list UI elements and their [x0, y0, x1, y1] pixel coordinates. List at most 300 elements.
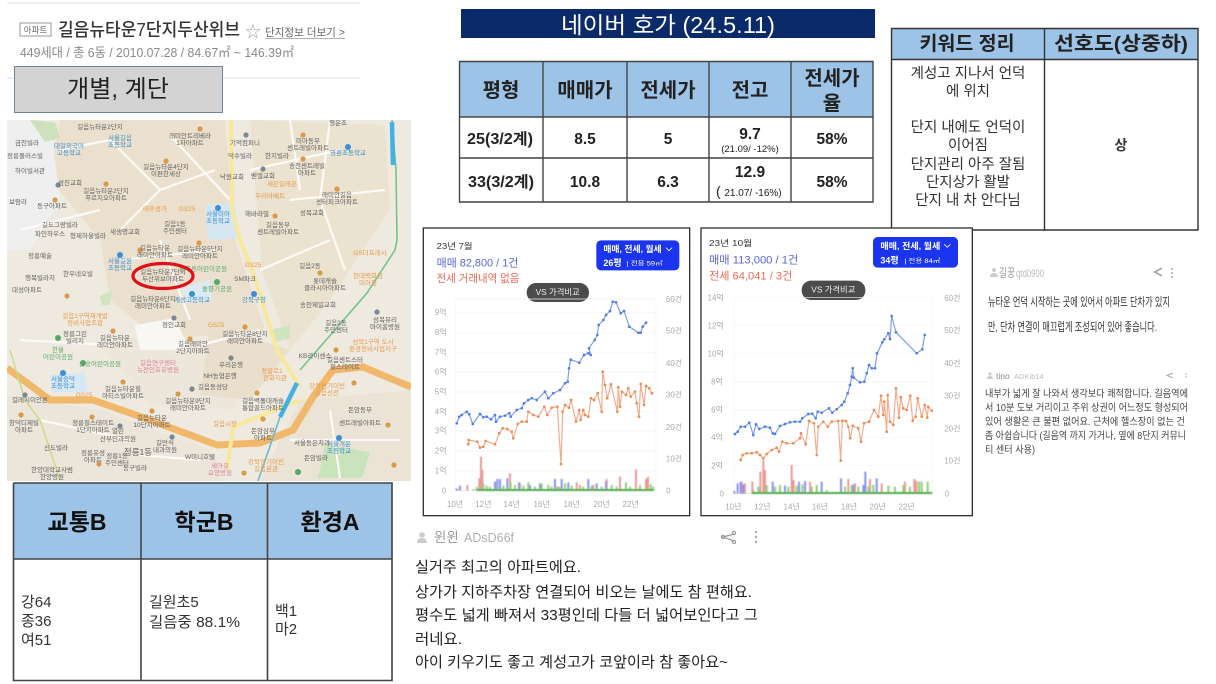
map place labels: 길음뉴타운힐	[105, 384, 141, 393]
map place labels: 정비사업조합	[67, 318, 103, 327]
map place labels: 서울숭덕	[51, 374, 75, 383]
marker: red ellipse around the complex: 두산위브아파트	[142, 274, 184, 283]
axis labels: 10년	[447, 499, 463, 509]
keyword list: 에 위치	[946, 83, 990, 100]
marker: red ellipse around the complex: 길음뉴타운7단지	[140, 267, 186, 276]
axis labels: 2억	[435, 446, 447, 456]
map place labels: 아파트	[15, 425, 33, 434]
map place labels: 길음본관	[254, 464, 278, 473]
price table headings: 전세가	[804, 67, 860, 90]
axis labels: 14년	[784, 501, 800, 511]
review: 윈윈	[415, 530, 758, 671]
map place labels: 2단지아파트	[176, 346, 210, 355]
map place labels: 길음동부	[266, 221, 290, 229]
axis labels: 14년	[504, 499, 520, 509]
map place labels: 정릉힐스테이트	[72, 418, 114, 427]
map place labels: 서울개운	[327, 439, 351, 448]
map place labels: 길음센트스터	[327, 355, 363, 364]
map place labels: 고등학교	[57, 148, 81, 157]
map place labels: 길음연구센터	[140, 358, 176, 367]
map place labels: 서울미아	[206, 209, 230, 218]
map place labels: 길음뉴타운5단지	[177, 244, 223, 253]
map place labels: 형제하울빌라	[70, 231, 106, 240]
axis labels: 10억	[708, 348, 724, 358]
map place labels: 아파트	[298, 168, 316, 177]
jeonse price line	[468, 372, 652, 464]
review text: 실거주 최고의 아파트에요.	[415, 559, 581, 576]
selector button: 34평	[880, 255, 899, 265]
price table headings	[483, 67, 860, 115]
price table headings: 전고	[732, 79, 768, 102]
icon: more dots	[1171, 268, 1173, 278]
road: arterial	[7, 367, 411, 445]
map place labels: 길음뉴타운2단지	[77, 122, 123, 131]
map place labels: GS25	[208, 322, 225, 329]
map place labels: 덕수빌라	[228, 151, 252, 160]
keyword list: 계성고 지나서 언덕	[911, 65, 1025, 82]
map place labels: 신도빌라	[44, 443, 68, 452]
map place labels: 세아유	[211, 461, 229, 470]
map place labels: 강북연기이빈	[248, 457, 284, 466]
selector button: | 전용 84㎡	[904, 257, 940, 265]
map place labels: 벧엘교회	[251, 171, 275, 180]
review: tino	[985, 371, 1188, 456]
map place labels: 정릉로1	[261, 366, 283, 375]
price table headings: 평형	[483, 79, 519, 102]
map place labels: 전화지관	[263, 373, 287, 382]
map place labels: 주민센터	[163, 226, 187, 235]
review text	[415, 559, 758, 671]
review text: 서 10분 도보 거리이고 주위 상권이 어느정도 형성되어	[985, 401, 1188, 414]
reviewer line: qtd0900	[1016, 268, 1044, 280]
axis labels: 20건	[666, 422, 682, 432]
map place labels: 센트레빌아파트	[339, 418, 381, 427]
map place labels: 래미안아파트	[182, 251, 218, 260]
map place labels: 돈암빌라	[304, 453, 328, 462]
review: 길꿍	[988, 266, 1173, 334]
price table rows: 21.07/ -16%)	[724, 188, 782, 199]
map place labels: 길음래미안	[178, 339, 208, 348]
price table rows: 25(3/2계)	[467, 130, 533, 148]
table cells: 길원초5	[149, 594, 199, 611]
complex header	[7, 3, 360, 78]
map place labels: 길음2동	[299, 262, 321, 270]
reviewer line	[990, 266, 1044, 280]
map place labels: 한양병원	[40, 472, 64, 481]
map place labels: 현대백화점	[353, 271, 383, 280]
badge: apartment: 아파트	[24, 25, 47, 35]
review text: 있어 생활은 큰 불편 없어요. 근처에 헬스장이 없는 건	[985, 415, 1185, 428]
map place labels: 래미안아파트	[227, 336, 263, 345]
axis labels: 22년	[623, 499, 639, 509]
map place labels: 정릉1동	[124, 447, 152, 457]
map place labels: 성복뷰리	[373, 315, 397, 324]
map place labels: 길음뉴타운9단지	[165, 396, 211, 405]
map place labels: 초등학교	[51, 381, 75, 390]
map place labels: 강북구청	[242, 295, 266, 304]
axis labels: 60건	[944, 293, 960, 303]
map place labels: 빌리지	[66, 336, 84, 345]
axis labels: 2억	[711, 460, 723, 470]
axis labels: 20건	[944, 423, 960, 433]
table cells: 백1	[275, 603, 297, 620]
map place labels: 한양대학교사범	[31, 465, 73, 474]
map place labels: 성복교회	[300, 208, 324, 217]
map place labels: 길음동성당	[198, 382, 228, 391]
map place labels: 돈암삼부	[251, 426, 275, 435]
map place labels: 송천제일교회	[300, 300, 336, 309]
map place labels: 힐스테이트	[330, 362, 360, 371]
axis labels: 20년	[594, 499, 610, 509]
price table rows: 6.3	[657, 174, 679, 191]
map place labels: 길음뉴타운6단지	[130, 294, 176, 303]
more link: 단지정보 더보기 >	[265, 26, 345, 39]
selector button: | 전용 59㎡	[627, 260, 663, 268]
map place labels: 길음뉴타운4단지	[143, 162, 189, 171]
price table rows: 9.7	[739, 126, 761, 143]
volume bars	[457, 457, 653, 491]
review text	[988, 295, 1170, 334]
price table	[459, 61, 873, 202]
map place labels: 정릉플러스빌	[7, 151, 43, 160]
map place labels: 돈암동부	[348, 406, 372, 414]
map place labels: 요양병원	[208, 468, 232, 477]
map place labels: 길음벽돌대캐슬	[242, 396, 284, 405]
map place labels: 대일외국어	[54, 141, 84, 150]
map place labels: 1단지아파트	[76, 425, 110, 434]
map place labels: 길도그랑빌라	[42, 220, 78, 229]
map place labels: 열린	[112, 427, 124, 435]
map place labels: 초등학교	[108, 263, 132, 272]
map place labels: 길만식	[156, 438, 174, 447]
title: Naver listing price	[461, 9, 875, 38]
map place labels: 창덕디제빌	[9, 418, 39, 427]
axis labels: 6억	[435, 367, 447, 377]
axis labels: 10건	[944, 456, 960, 466]
jeonse price line	[741, 388, 932, 461]
icon: more dots	[1185, 373, 1187, 378]
map place labels: 보람라	[9, 197, 27, 206]
axis labels: 10건	[666, 454, 682, 464]
axis labels: 6억	[711, 405, 723, 415]
map place labels: 대성아파트	[12, 285, 42, 294]
axis labels	[708, 292, 960, 511]
reviewer line: ADKib14	[1014, 372, 1044, 381]
map place labels: 한지빌라	[265, 151, 289, 160]
keyword list: 단지관리 아주 잘됨	[911, 156, 1025, 173]
map place labels: 센트레빌아파트	[257, 227, 299, 236]
map place labels: 환경정비사업지구	[349, 344, 397, 353]
keyword list: 단지 내 차 안다님	[915, 192, 1021, 209]
map place labels: 정릉1동	[106, 451, 128, 460]
axis labels: 40건	[666, 358, 682, 368]
map place labels: 행운초	[329, 118, 347, 127]
keyword table	[891, 28, 1198, 230]
map place labels: 클라시아아파트	[304, 283, 346, 292]
table headings: 환경A	[301, 509, 359, 535]
map place labels: 파인하우스	[35, 229, 65, 238]
map place labels: 아파트	[254, 433, 272, 442]
map place labels: 성진교회	[58, 178, 82, 187]
table cells: 마2	[275, 621, 297, 638]
chart: 34 pyeong price history: 매매 113,000 / 1건	[709, 253, 798, 266]
map place labels: 이편한세상	[151, 169, 181, 178]
axis labels: 4억	[435, 406, 447, 416]
axis labels: 5억	[435, 387, 447, 397]
map place labels: 솔향기공원	[202, 284, 232, 293]
map place labels: 영훈초등학교	[330, 148, 366, 157]
map place labels: 한우네오빌	[63, 269, 93, 278]
map place labels: 센터피크아파트	[316, 197, 358, 206]
map place labels: GS25	[76, 392, 93, 399]
axis labels: 0	[666, 486, 671, 495]
review text: 러네요.	[415, 631, 462, 648]
table headings	[48, 509, 359, 535]
axis labels: 12년	[475, 499, 491, 509]
review text: 평수도 넓게 빠져서 33평인데 다들 더 넓어보인다고 그	[415, 607, 758, 624]
review text	[985, 387, 1188, 456]
reviewer line	[987, 371, 1044, 381]
map place labels: NH농협은행	[203, 371, 237, 380]
keyword table headings: 선호도(상중하)	[1054, 33, 1188, 55]
icon: share	[721, 531, 736, 544]
axis labels: 1억	[435, 466, 447, 476]
map place labels: 래미안아파트	[137, 250, 173, 259]
badge: apartment	[20, 23, 51, 36]
map place labels: GS25	[245, 262, 262, 269]
map place labels: 한울	[52, 346, 64, 354]
map place labels: 서울길원	[108, 256, 132, 265]
chart: 26 pyeong price history: 매매 82,800 / 1건	[437, 256, 518, 269]
axis labels: 16년	[534, 499, 550, 509]
map place labels: 래미안트리베라	[169, 131, 211, 140]
axis labels: 3억	[435, 426, 447, 436]
map place labels: SM파크	[234, 274, 256, 283]
map place labels: 세븐일레븐	[267, 179, 297, 188]
review text: 좀 아쉽습니다 (길음역 까지 가거나, 옆에 8단지 커뮤니	[985, 429, 1186, 442]
map place labels: 래미안아파트	[97, 340, 133, 349]
keyword table headings: 키워드 정리	[919, 33, 1015, 55]
map place labels: 동구아파트	[37, 201, 67, 210]
map place labels: 래미안아파트	[135, 301, 171, 310]
axis labels: 7억	[435, 347, 447, 357]
compare pill: VS 가격비교	[536, 287, 580, 297]
map place labels: 롯데캐슬	[313, 276, 337, 285]
map place labels: 길음선전	[315, 388, 339, 397]
map place labels: 주민센터	[105, 458, 129, 467]
axis labels: 10년	[725, 501, 741, 511]
map place labels: 주민센터	[324, 325, 348, 334]
map place labels: 승숭어린이공원	[79, 359, 121, 368]
map place labels: 정릉유성	[81, 448, 105, 457]
map place labels: 아파트	[84, 455, 102, 464]
chart: 26 pyeong price history: 전세 거래내역 없음	[437, 272, 519, 285]
price table rows: 10.8	[570, 174, 600, 191]
map place labels: 길음뉴타운	[137, 413, 167, 422]
chart: 34 pyeong price history: 23년 10월	[709, 237, 752, 248]
axis labels: 12억	[708, 320, 724, 330]
axis labels: 0	[945, 489, 950, 498]
chart: 34 pyeong price history	[701, 228, 972, 516]
map place labels: 금천빌라	[15, 138, 39, 147]
map place labels: 길음1구역재개발	[62, 311, 108, 320]
reviewer line: ADsD66f	[464, 531, 515, 545]
axis labels: 8억	[435, 327, 447, 337]
reviewer line: 길꿍	[999, 266, 1015, 280]
heading box: terrain	[14, 66, 222, 112]
axis labels: 0	[719, 489, 724, 498]
icon: share	[1155, 268, 1162, 276]
price table headings: 전세가	[640, 79, 696, 102]
map place labels: 우리은행	[219, 360, 243, 369]
map place labels: GS더프레시	[353, 248, 387, 257]
map place labels: 길음2동	[325, 319, 347, 327]
heading box: terrain: 개별, 계단	[67, 76, 169, 103]
map place labels: 정릉예술	[28, 251, 52, 260]
map place labels: 길음뉴타운	[100, 333, 130, 342]
map place labels: 1차아파트	[176, 138, 204, 147]
selector button: 매매, 전세, 월세	[603, 244, 662, 254]
complex summary: 449세대 / 총 6동 / 2010.07.28 / 84.67㎡ ~ 146.39㎡	[20, 45, 294, 60]
axis labels: 22년	[899, 501, 915, 511]
map place labels: 태후성가	[143, 204, 167, 213]
map place labels: 낙원교회	[220, 172, 244, 181]
map place labels	[7, 118, 400, 481]
map place labels: 송천센트레빌	[289, 161, 325, 170]
icon: more dots	[755, 531, 757, 543]
price table rows: 58%	[816, 174, 848, 191]
table headings: 교통B	[48, 509, 106, 535]
map place labels: 서울동은치과	[294, 438, 330, 447]
map place labels: 정인교회	[162, 320, 186, 329]
price table rows: (	[716, 183, 721, 199]
table cells: 강64	[21, 594, 52, 611]
selector button: 26평	[603, 258, 622, 268]
price table rows: 5	[664, 131, 673, 148]
keyword list: 이어짐	[948, 137, 988, 154]
review text: 내부가 넓게 잘 나와서 생각보다 쾌적합니다. 길음역에	[985, 387, 1188, 400]
selector button	[873, 237, 958, 268]
table cells	[21, 594, 297, 649]
table cells: 종36	[21, 613, 52, 630]
map place labels: 계성고등학교	[174, 295, 210, 304]
chart: 26 pyeong price history: 23년 7월	[437, 240, 473, 251]
map place labels: 어린이공원	[43, 352, 73, 361]
axis labels: 18년	[564, 499, 580, 509]
price table headings: 매매가	[557, 79, 613, 102]
map place labels: 센트레빌아파트	[287, 143, 329, 152]
keyword list	[911, 65, 1025, 209]
map place labels: 길음뉴타운2단지	[83, 186, 129, 195]
map place labels: 강북연기이빈	[309, 381, 345, 390]
axis labels: 4억	[711, 432, 723, 442]
keyword list: 단지상가 활발	[926, 174, 1010, 191]
map place labels: 우리바베트	[255, 191, 285, 200]
map place labels: 동구빌라	[123, 463, 147, 472]
map place labels: 성북1구역 도시	[352, 337, 394, 346]
axis labels: 16년	[812, 501, 828, 511]
map place labels: 미아점	[359, 278, 377, 287]
axis labels: 18년	[841, 501, 857, 511]
keyword list: 단지 내에도 언덕이	[911, 119, 1025, 136]
compare pill: VS 가격비교	[811, 285, 856, 295]
marker: red ellipse around the complex	[133, 264, 193, 288]
map place labels: GS25	[179, 206, 196, 213]
axis labels: 0	[442, 486, 447, 495]
map place labels: 걸레시이언론	[12, 395, 48, 404]
map place labels: 서울길음	[108, 133, 132, 142]
map	[7, 118, 411, 481]
selector button	[596, 240, 679, 270]
map place labels: 10단지아파트	[133, 420, 171, 429]
axis labels: 12년	[754, 501, 770, 511]
reviewer line: 윈윈	[434, 530, 459, 545]
map place labels: 행복빌라지	[25, 273, 55, 282]
sale price line	[735, 316, 925, 435]
selector button: 매매, 전세, 월세	[880, 241, 940, 251]
sale price line	[457, 302, 646, 424]
review text: 티 센터 사용)	[985, 444, 1035, 456]
map place labels: 미아동부	[296, 136, 320, 145]
map place labels: 길음뉴타운	[140, 243, 170, 252]
map place labels: 초등학교	[206, 216, 230, 225]
map place labels: 래미안길음	[322, 190, 352, 199]
map place labels: 길음시장	[213, 419, 237, 428]
map place labels: 뉴전인호유병원	[137, 365, 179, 374]
price table rows: 33(3/2계)	[468, 173, 534, 191]
map place labels: 초등학교	[327, 446, 351, 455]
map place labels: 통합골드아파트	[242, 403, 284, 412]
map place labels: 초등학교	[108, 140, 132, 149]
map place labels: 내과의원	[153, 445, 177, 454]
map place labels: 해바라밀	[245, 209, 269, 218]
map place labels: 길음1동	[164, 220, 186, 228]
axis labels: 14억	[708, 292, 724, 302]
map place labels: KB라이센스	[299, 351, 331, 360]
complex name: 길음뉴타운7단지두산위브	[58, 20, 240, 40]
map place labels: W미니호텔	[185, 452, 215, 461]
axis labels: 30건	[666, 390, 682, 400]
compare pill	[527, 283, 589, 302]
axis labels: 9억	[435, 307, 447, 317]
chart: 26 pyeong price history	[423, 228, 690, 516]
icon: star: ☆	[245, 23, 261, 41]
table headings: 학군B	[175, 509, 233, 535]
axis labels	[435, 294, 682, 509]
price table rows: 8.5	[574, 131, 596, 148]
map place labels: 길음뉴타운8단지	[222, 329, 268, 338]
ranking table: transport, school, environment	[13, 483, 392, 680]
map place labels: 기억컴퍼니	[230, 138, 260, 147]
map place labels: 래미안아파트	[170, 403, 206, 412]
axis labels: 50건	[666, 326, 682, 336]
map place labels: 마이홈병원	[370, 322, 400, 331]
map place labels: 정릉그린	[63, 329, 87, 338]
compare pill	[802, 281, 865, 300]
map place labels: 하이빌서관	[15, 166, 45, 175]
price table rows: 58%	[816, 131, 848, 148]
map place labels: 아티스빌아파트	[102, 391, 144, 400]
map place labels: 산부인과의원	[100, 434, 136, 443]
chart: 34 pyeong price history: 전세 64,041 / 3건	[709, 269, 792, 282]
axis labels: 50건	[944, 325, 960, 335]
review text: 상가가 지하주차장 연결되어 비오는 날에도 참 편해요.	[415, 584, 752, 601]
preference rating: 상	[1115, 137, 1128, 153]
map place labels: 푸르지오아파트	[85, 193, 127, 202]
reviewer line	[417, 530, 515, 545]
keyword table headings	[919, 33, 1188, 55]
axis labels: 60건	[666, 294, 682, 304]
